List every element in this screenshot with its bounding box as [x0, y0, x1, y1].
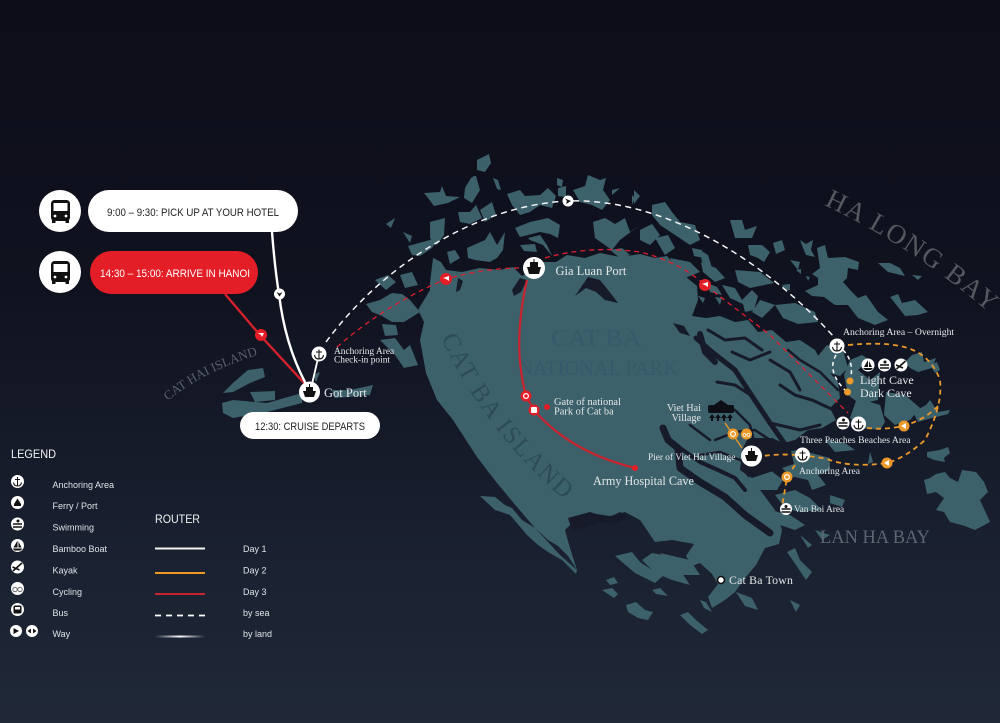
marker: Pier of Viet Hai Village [741, 446, 762, 466]
label: Light Cave Dark Cave: Dark Cave [860, 386, 912, 400]
marker: bike stop orange [741, 428, 752, 440]
callout: arrive in Hanoi [90, 251, 258, 294]
heading: router: ROUTER [155, 512, 200, 526]
way marker: red west [440, 273, 452, 285]
route: Day 3 Gia Luan to Army Hospital Cave [519, 280, 635, 468]
callout: cruise departs: 12:30: CRUISE DEPARTS [255, 421, 365, 433]
marker: overnight anchor [830, 338, 844, 354]
label: Cat Hai Island: CAT HAI ISLAND [164, 348, 256, 400]
route: Got Port to anchoring [312, 354, 319, 384]
marker: Army Hospital Cave [632, 465, 638, 471]
label: Gate of national Park of Cat ba: Gate of national [554, 397, 621, 408]
label: Gate of national Park of Cat ba [554, 397, 621, 418]
Lan Ha group [780, 450, 830, 490]
northern arc islets [477, 154, 491, 172]
callout: pick up: 9:00 – 9:30: PICK UP AT YOUR HOTEL [107, 207, 279, 219]
key: by land: by land [243, 629, 272, 639]
marker: kayak icon [894, 358, 908, 372]
Ha Long north-east group [800, 240, 815, 257]
key: Day 2: Day 2 [243, 566, 267, 576]
route: Day 1 bus from hotel [272, 232, 306, 384]
right-hand islets [927, 447, 950, 462]
label: Light Cave Dark Cave: Light Cave [860, 373, 914, 387]
legend item: anchoring area [11, 475, 114, 490]
legend item: bamboo boat: Bamboo Boat [52, 544, 108, 554]
legend item: bus: Bus [52, 608, 69, 618]
key: by sea: by sea [243, 608, 270, 618]
way marker: red east [699, 279, 711, 291]
route: Day 3 sea dashed [337, 250, 848, 413]
label: Anchoring Area Check-in point [334, 347, 395, 366]
marker: cycling stop red [520, 390, 532, 402]
marker: Dark Cave [844, 388, 851, 396]
way marker: orange upper [898, 420, 910, 432]
legend item: bamboo boat [11, 539, 108, 554]
panel: router key [155, 512, 272, 639]
legend item: ferry port: Ferry / Port [52, 501, 98, 511]
legend item: bus [11, 603, 69, 618]
key: Day 1: Day 1 [243, 544, 267, 554]
way marker: red route [255, 329, 267, 341]
label: Lan Ha Bay: LAN HA BAY [820, 527, 930, 548]
label: Anchoring Area Check-in point: Anchoring Area [334, 347, 395, 357]
marker: Light Cave [846, 378, 854, 384]
legend item: cycling: Cycling [52, 587, 82, 597]
label: Gate of national Park of Cat ba: Park of Cat ba [554, 406, 614, 418]
label: Cat Ba National Park: CAT BA [551, 326, 642, 352]
label: Viet Hai Village [667, 403, 701, 424]
icon: Viet Hai village houses and trees [708, 400, 734, 421]
route: Day 2 orange loop [763, 344, 940, 507]
map: dark channels through the islands [663, 330, 838, 533]
marker: cycling stop orange [728, 428, 738, 440]
route: Day 1 sea dashed [326, 201, 834, 342]
marker: bamboo boat icon [862, 358, 874, 372]
marker: Gia Luan Port [523, 257, 545, 279]
marker: anchoring area at check-in [312, 346, 326, 362]
marker: anchoring area [795, 448, 810, 462]
way marker: land route [274, 288, 285, 300]
marker: bus to Hanoi [39, 251, 81, 293]
legend item: way [10, 625, 71, 639]
marker: swimming icon [878, 358, 891, 372]
label: Cat Ba National Park: NATIONAL PARK [518, 356, 678, 380]
legend item: cycling [11, 582, 82, 597]
panel: legend [10, 447, 114, 639]
label: Cat Ba Town: Cat Ba Town [729, 573, 793, 587]
label: Anchoring Area Check-in point: Check-in point [334, 356, 390, 366]
label: Gia Luan Port: Gia Luan Port [556, 264, 627, 278]
label: Army Hospital Cave: Army Hospital Cave [593, 474, 694, 488]
map: islands of Cat Ba and Ha Long Bay [222, 154, 990, 634]
legend item: ferry port [11, 496, 98, 511]
label: Viet Hai Village: Village [672, 413, 701, 424]
Cat Hai island [223, 368, 265, 393]
legend item: kayak: Kayak [52, 566, 78, 576]
west fingers and southern islets [480, 496, 577, 574]
island labels [164, 190, 1000, 548]
legend item: kayak [11, 560, 78, 576]
label: Cat Ba National Park [518, 326, 678, 380]
legend item: anchoring area: Anchoring Area [52, 480, 114, 490]
marker: Three Peaches swimming [836, 416, 850, 430]
marker: Gate of national park [544, 404, 550, 410]
label: Anchoring Area Overnight: Anchoring Area – Overnight [843, 327, 954, 338]
label: Three Peaches Beaches Area: Three Peaches Beaches Area [800, 435, 911, 446]
label: Anchoring Area: Anchoring Area [799, 467, 861, 477]
route: Day 3 bus to Hanoi [225, 294, 305, 384]
way marker: orange lower [882, 458, 892, 468]
label: Van Boi Area: Van Boi Area [794, 505, 844, 515]
heading: legend: LEGEND [11, 447, 56, 461]
marker: Cat Ba Town [718, 576, 724, 584]
label: Viet Hai Village: Viet Hai [667, 403, 701, 414]
label: Pier of Viet Hai Village: Pier of Viet Hai Village [648, 452, 735, 463]
label: Got Port: Got Port [324, 386, 367, 400]
route: Day 2 village link [725, 423, 742, 448]
label: Cat Ba Island: CAT BA ISLAND [444, 334, 572, 496]
callout: cruise departs [240, 412, 380, 439]
marker: way stop orange [782, 472, 792, 482]
marker: Got Port [299, 382, 320, 402]
route: Day 1 dashed around caves [833, 350, 851, 392]
marker: bus at hotel [39, 190, 81, 232]
way marker: sea route [562, 196, 574, 206]
callout: pick up [88, 190, 298, 232]
marker: Van Boi swimming [780, 503, 792, 515]
Cat Ba main island [418, 253, 840, 608]
callout: arrive in Hanoi: 14:30 – 15:00: ARRIVE IN HANOI [100, 268, 250, 280]
marker: bus stop red [528, 404, 540, 416]
label: Light Cave Dark Cave [860, 373, 914, 400]
legend item: way: Way [52, 629, 71, 639]
marker: Three Peaches anchor [851, 416, 866, 432]
legend item: swimming: Swimming [52, 522, 94, 532]
key: Day 3: Day 3 [243, 587, 267, 597]
legend item: swimming [11, 518, 94, 532]
